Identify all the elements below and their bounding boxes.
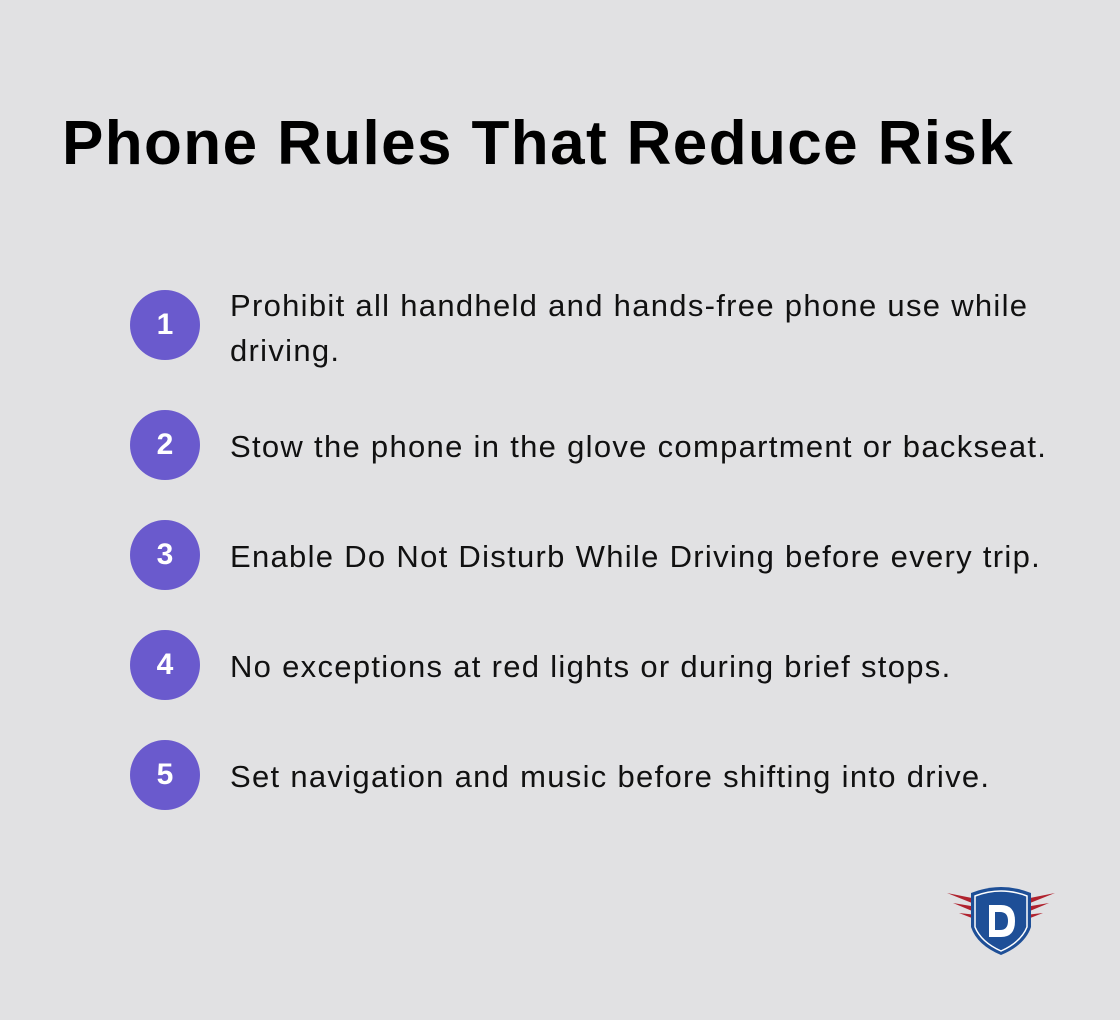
item 5: 5 — [157, 758, 173, 791]
item 2: Stow the phone in the glove compartment or backseat. — [230, 429, 1047, 464]
item 3: 3 — [157, 538, 173, 571]
item 5: Set navigation and music before shifting into drive. — [230, 759, 990, 794]
item 2: 2 — [157, 428, 173, 461]
item 4: No exceptions at red lights or during brief stops. — [230, 649, 952, 684]
item 1: Prohibit all handheld and hands-free phone use while — [230, 288, 1028, 323]
item 1: driving. — [230, 333, 340, 368]
item 4: 4 — [157, 648, 173, 681]
item 1: 1 — [157, 308, 173, 341]
title: Phone Rules That Reduce Risk — [62, 109, 1014, 178]
item 5 — [130, 740, 990, 810]
item 3: Enable Do Not Disturb While Driving before every trip. — [230, 539, 1041, 574]
item 3 — [130, 520, 1041, 590]
item 2 — [130, 410, 1047, 480]
item 4 — [130, 630, 952, 700]
item 1 — [130, 288, 1028, 368]
icon: logo — [947, 887, 1055, 955]
